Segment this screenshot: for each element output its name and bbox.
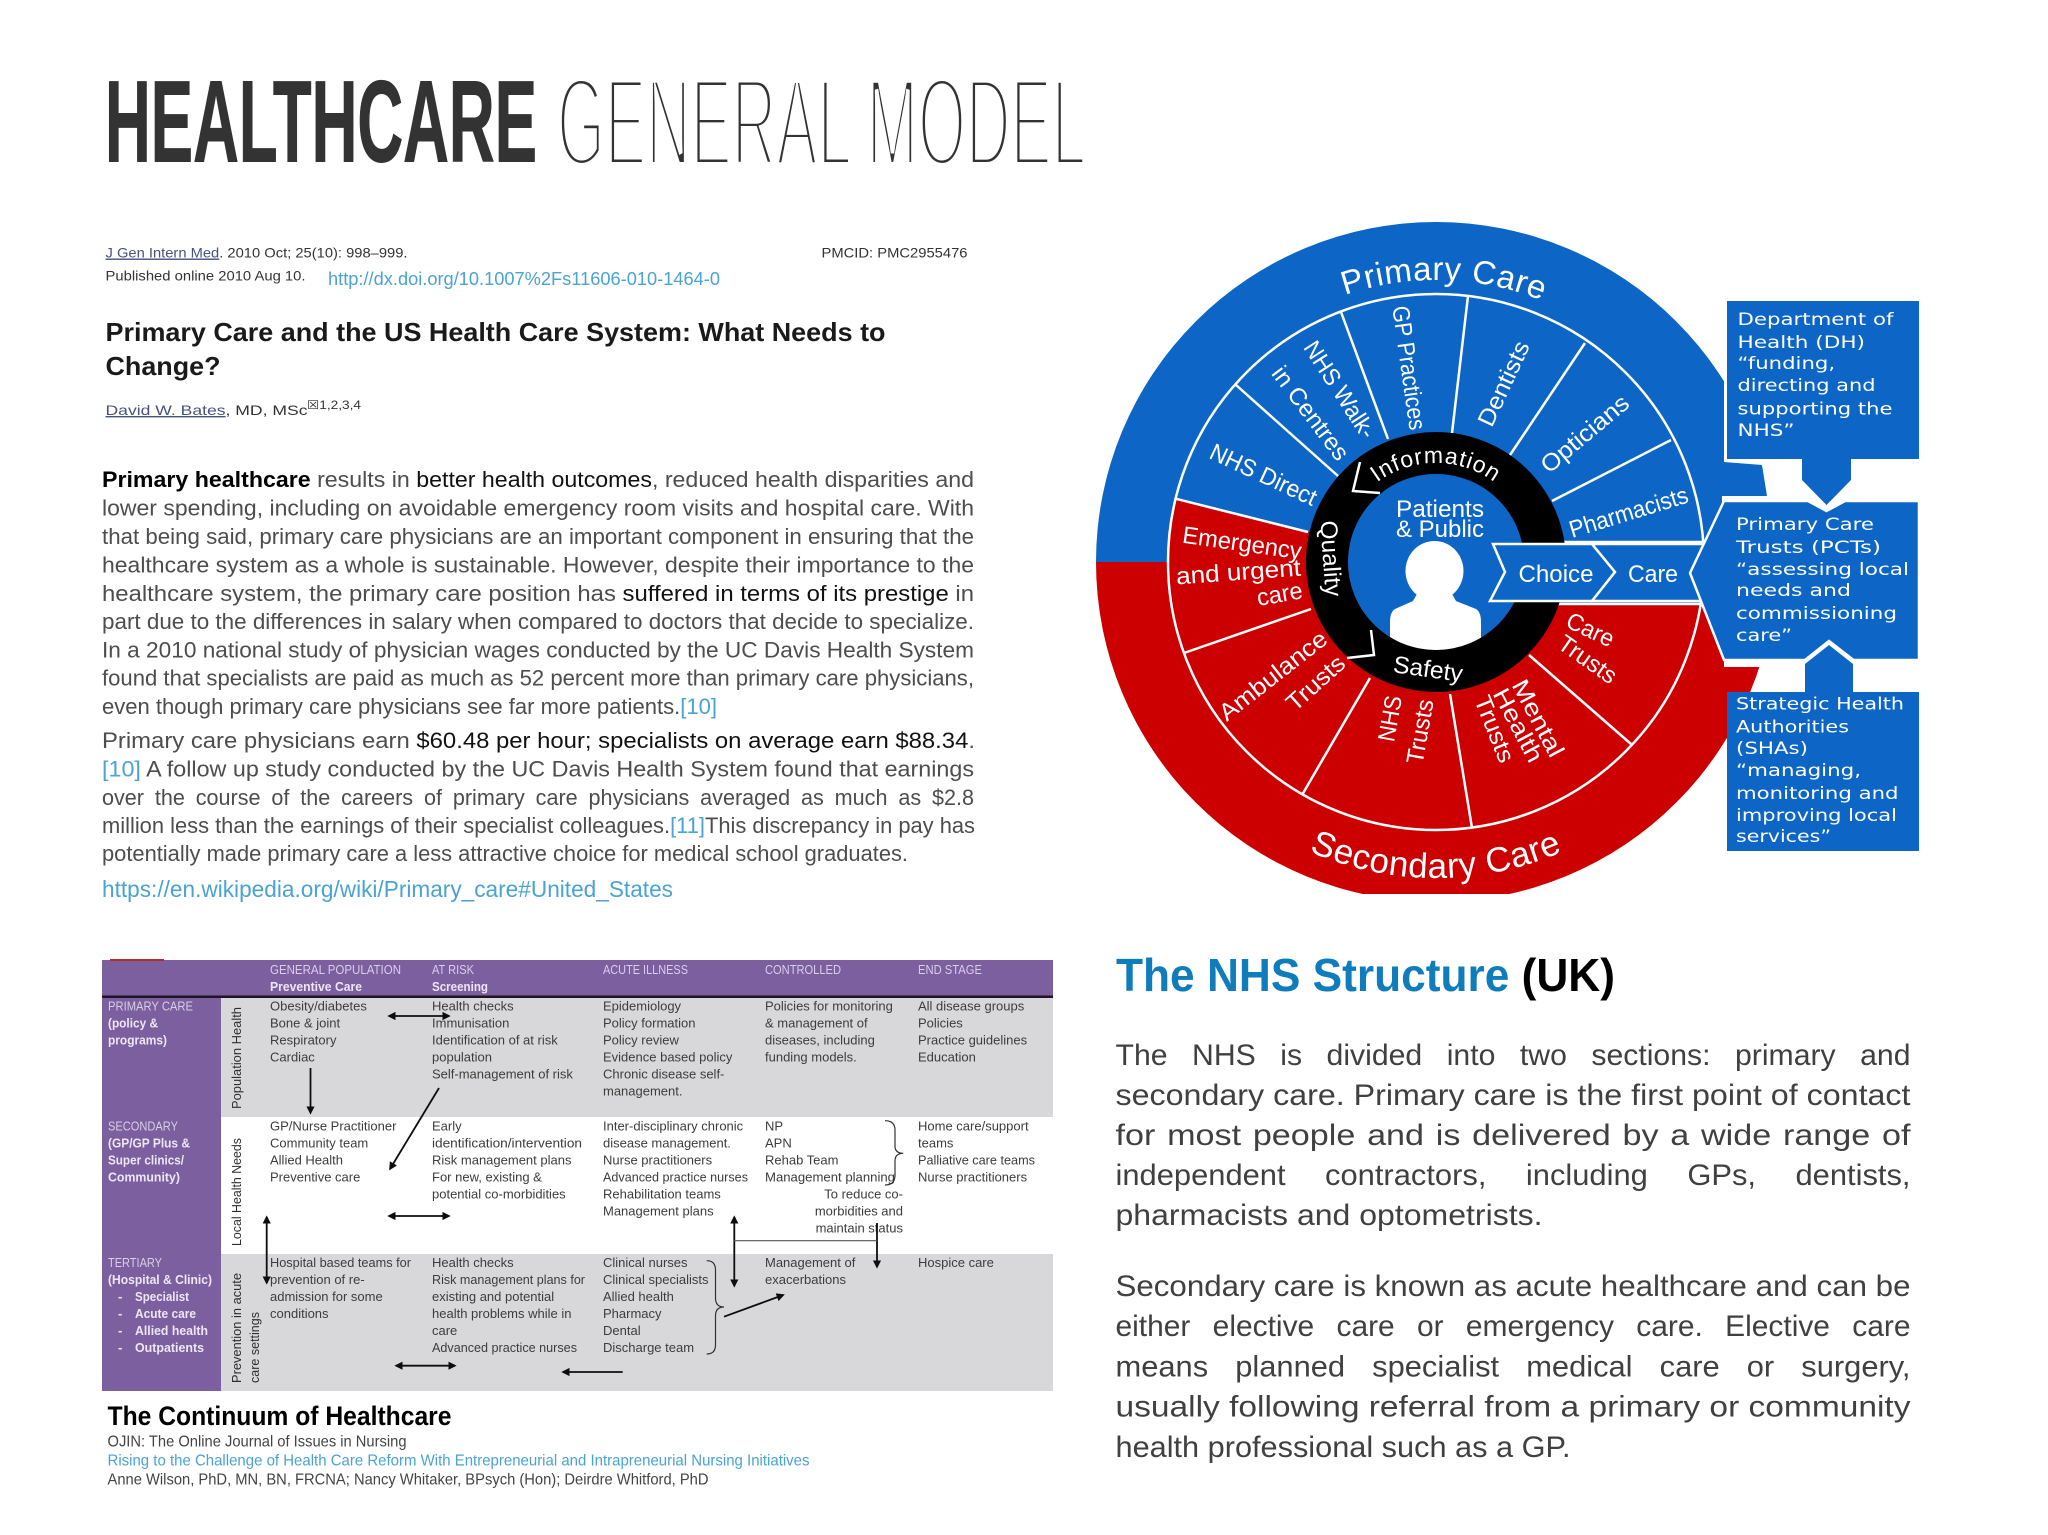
row: primary care cells: Education (918, 1050, 976, 1064)
sector labels: secondary care (1175, 522, 1622, 767)
sector labels: primary care: NHS Walk- (1298, 336, 1381, 444)
article citation header: David W. Bates , MD, MSc (106, 402, 308, 418)
chart: NHS structure wheel (1096, 222, 1919, 894)
row headers: SECONDARY (108, 1118, 178, 1134)
column headers: ACUTE ILLNESS (603, 962, 688, 977)
row: primary care cells: All disease groups (918, 998, 1025, 1014)
row: tertiary cells: conditions (270, 1306, 329, 1321)
row: secondary cells: Palliative care teams (918, 1152, 1035, 1168)
article citation header: Primary Care and the US Health Care System: What Needs to (106, 317, 886, 347)
row headers: Specialist (135, 1289, 190, 1304)
column headers: GENERAL POPULATION (270, 962, 401, 977)
row: tertiary cells: Management of (765, 1255, 856, 1270)
row: secondary cells: To reduce co- (824, 1186, 903, 1202)
row headers: - (118, 1323, 122, 1338)
row: tertiary cells: Risk management plans for (432, 1272, 586, 1287)
article citation header: Change? (106, 351, 220, 381)
title: GENERAL MODEL (557, 53, 1086, 192)
sector labels: primary care (1205, 304, 1692, 544)
text block: primary healthcare paragraph: In a 2010 national study of physician wages conducted by the UC Davis Health System (102, 638, 974, 662)
panel: Primary Care Trusts: needs and (1736, 581, 1851, 601)
row: primary care cells: & management of (765, 1016, 868, 1030)
text block: physician earnings paragraph: million less than the earnings of their specialist colleagues.[11]This discrepancy in pay has (102, 813, 975, 838)
text block: physician earnings paragraph: over the course of the careers of primary care physicians averaged as much as $2.8 (102, 785, 974, 810)
row: primary care cells: Policy formation (603, 1016, 695, 1030)
row: secondary cells: Preventive care (270, 1170, 360, 1184)
label: Patients & Public: & Public (1396, 516, 1484, 543)
panel: Primary Care Trusts: “assessing local (1736, 560, 1909, 580)
sector labels: secondary care: Trusts (1553, 630, 1622, 690)
panel: Strategic Health Authorities: Authorities (1736, 718, 1849, 738)
sector labels: primary care: GP Practices (1386, 304, 1430, 432)
row: tertiary cells: Allied health (603, 1289, 674, 1304)
label: Patients & Public: Patients (1396, 496, 1484, 523)
row: secondary cells: Rehab Team (765, 1152, 838, 1168)
wikipedia link: https://en.wikipedia.org/wiki/Primary_care#United_States (102, 876, 673, 902)
label: Safety: Safety (1392, 651, 1465, 688)
text block: physician earnings paragraph: potentially made primary care a less attractive choice for medical school graduates. (102, 841, 908, 866)
caption: continuum of healthcare: Anne Wilson, PhD, MN, BN, FRCNA; Nancy Whitaker, BPsych (Hon); Deirdre Whitford, PhD (108, 1471, 708, 1488)
text block: primary healthcare paragraph: lower spending, including on avoidable emergency room visits and hospital care. With (102, 496, 974, 520)
row: primary care cells: Policies for monitoring (765, 998, 893, 1014)
panel: Strategic Health Authorities: (SHAs) (1736, 739, 1808, 759)
outer ring: secondary care (1096, 562, 1760, 894)
row headers (108, 998, 212, 1355)
row: tertiary cells: Clinical specialists (603, 1272, 709, 1287)
panel: Strategic Health Authorities: Strategic Health (1736, 694, 1904, 714)
row headers: Acute care (135, 1306, 196, 1321)
rotated row labels: Prevention in acute (229, 1273, 244, 1383)
text block: primary healthcare paragraph: healthcare system, the primary care position has suffered in terms of its prestige in (102, 581, 974, 606)
icon: person (1390, 541, 1481, 660)
sector labels: primary care: Opticians (1536, 390, 1635, 479)
label: Choice: Choice (1518, 561, 1594, 588)
row headers: Allied health (135, 1323, 208, 1338)
panel: Primary Care Trusts: Primary Care (1736, 515, 1874, 535)
row: primary care cells: Cardiac (270, 1050, 315, 1064)
text block: secondary care: either elective care or emergency care. Elective care (1116, 1310, 1910, 1343)
row: tertiary cells: prevention of re- (270, 1272, 365, 1287)
panel: Strategic Health Authorities (1727, 645, 1919, 851)
article citation header (106, 244, 968, 418)
rotated row labels: care settings (247, 1312, 262, 1383)
row headers: - (118, 1289, 122, 1304)
sector labels: secondary care: and urgent (1175, 555, 1302, 590)
row: secondary cells: Inter-disciplinary chronic (603, 1118, 744, 1134)
label: Patients & Public (1396, 496, 1484, 543)
text block: physician earnings paragraph: Primary care physicians earn $60.48 per hour; specialists on average earn $88.34 . (102, 728, 975, 753)
text block: NHS sections: The NHS is divided into two sections: primary and (1116, 1039, 1910, 1072)
caption: continuum of healthcare: The Continuum of Healthcare (108, 1401, 452, 1431)
column headers: Preventive Care (270, 979, 362, 994)
row: tertiary cells: Pharmacy (603, 1306, 662, 1321)
row: primary care cells: Health checks (432, 998, 514, 1014)
row: primary care cells: Identification of at risk (432, 1032, 558, 1048)
caption: continuum of healthcare: OJIN: The Online Journal of Issues in Nursing (108, 1434, 406, 1451)
column headers: Screening (432, 979, 488, 994)
panel: Department of Health: supporting the (1738, 400, 1892, 420)
row: secondary cells: Nurse practitioners (603, 1152, 713, 1168)
panel: Department of Health: NHS” (1738, 421, 1794, 441)
row headers: PRIMARY CARE (108, 998, 193, 1014)
row: primary care cells: Bone & joint (270, 1016, 340, 1030)
row: primary care cells: population (432, 1050, 492, 1064)
row headers: (GP/GP Plus & (108, 1136, 190, 1150)
caption: continuum of healthcare: Rising to the Challenge of Health Care Reform With Entrepreneurial and Intrapreneurial Nursing Initiatives (108, 1453, 810, 1470)
label: Primary Care: Primary Care (1340, 261, 1544, 298)
row: primary care cells: Self-management of risk (432, 1066, 573, 1082)
title: HEALTHCARE (105, 56, 537, 186)
row: secondary cells: Risk management plans (432, 1152, 572, 1168)
panel: Department of Health: Health (DH) (1738, 333, 1865, 353)
row headers: Outpatients (135, 1340, 204, 1355)
panel: Strategic Health Authorities: services” (1736, 827, 1831, 847)
article citation header: ☒1,2,3,4 (307, 398, 361, 412)
text block: secondary care: means planned specialist medical care or surgery, (1116, 1350, 1910, 1384)
sector labels: primary care: in Centres (1266, 361, 1354, 466)
panel: Strategic Health Authorities: improving local (1736, 806, 1897, 826)
row: secondary cells: teams (918, 1136, 954, 1150)
sector labels: secondary care: care (1255, 577, 1305, 612)
column headers: END STAGE (918, 962, 982, 977)
row headers: - (118, 1340, 122, 1355)
row: secondary cells: potential co-morbidities (432, 1186, 566, 1202)
heading: NHS structure: The NHS Structure (UK) (1116, 949, 1615, 1001)
sector labels: secondary care: Ambulance (1214, 625, 1333, 727)
arrows and braces (267, 1016, 903, 1372)
panel: Strategic Health Authorities: “managing, (1736, 761, 1861, 781)
row: secondary cells: Advanced practice nurses (603, 1170, 748, 1184)
row: secondary cells: Home care/support (918, 1118, 1029, 1134)
inner wheel: secondary care sector (1169, 500, 1700, 829)
rotated row labels: Local Health Needs (229, 1138, 244, 1246)
row: tertiary cells: existing and potential (432, 1289, 554, 1304)
row: primary care cells: Policy review (603, 1032, 679, 1048)
row: primary care cells: Respiratory (270, 1032, 337, 1048)
sector labels: primary care: Dentists (1473, 337, 1536, 431)
row: secondary cells: APN (765, 1136, 792, 1150)
text block: NHS sections (1116, 1039, 1911, 1232)
row: primary care cells: funding models. (765, 1050, 857, 1064)
row: tertiary cells: Dental (603, 1323, 641, 1338)
text block: primary healthcare paragraph: Primary healthcare results in better health outcomes , reduced health disparities and (102, 467, 974, 492)
article citation header: Published online 2010 Aug 10. (106, 268, 306, 284)
row headers: programs) (108, 1032, 167, 1048)
row headers: (policy & (108, 1016, 158, 1030)
row: secondary cells: Nurse practitioners (918, 1170, 1028, 1184)
row: tertiary cells: Hospice care (918, 1255, 994, 1270)
row headers: (Hospital & Clinic) (108, 1272, 212, 1287)
row: primary care cells: Policies (918, 1016, 963, 1030)
row: secondary cells: Allied Health (270, 1152, 343, 1168)
row: primary care cells: Practice guidelines (918, 1032, 1028, 1048)
panel: Primary Care Trusts: commissioning (1736, 604, 1897, 624)
row: secondary cells: identification/intervention (432, 1136, 582, 1150)
sector labels: secondary care: Trusts (1281, 650, 1351, 717)
arrow: care (1592, 544, 1704, 601)
article citation header: PMCID: PMC2955476 (822, 244, 968, 260)
sector labels: secondary care: Health (1487, 684, 1548, 767)
row: tertiary cells: exacerbations (765, 1272, 846, 1287)
text block: NHS sections: for most people and is delivered by a wide range of (1116, 1119, 1911, 1152)
row: tertiary cells: health problems while in (432, 1306, 571, 1321)
row: secondary cells: Early (432, 1118, 462, 1134)
panel: Primary Care Trusts: care” (1736, 626, 1792, 646)
arrow: choice (1490, 544, 1615, 601)
text block: secondary care: Secondary care is known as acute healthcare and can be (1116, 1270, 1910, 1303)
text block: physician earnings paragraph (102, 728, 975, 866)
row: tertiary cells: Advanced practice nurses (432, 1340, 577, 1355)
row headers: - (118, 1306, 122, 1321)
rotated row labels (229, 1007, 262, 1383)
row headers: Community) (108, 1170, 180, 1184)
sector labels: secondary care: Trusts (1468, 692, 1520, 767)
ring arrow marks (1347, 462, 1380, 658)
sector labels: secondary care: Emergency (1181, 522, 1303, 565)
text block: primary healthcare paragraph: part due to the differences in salary when compared to doctors that decide to specialize. (102, 609, 974, 634)
row: primary care cells: Epidemiology (603, 998, 682, 1014)
text block: primary healthcare paragraph (102, 467, 974, 719)
row: primary care cells: Chronic disease self- (603, 1066, 724, 1082)
row: tertiary cells: Discharge team (603, 1340, 694, 1355)
chart: continuum of healthcare table (102, 959, 1053, 1391)
text block: secondary care: usually following referral from a primary or community (1116, 1390, 1910, 1424)
text block: secondary care (1116, 1270, 1910, 1464)
label: Secondary Care: Secondary Care (1312, 832, 1560, 884)
sector labels: secondary care: Mental (1506, 675, 1569, 762)
column headers: CONTROLLED (765, 962, 841, 977)
panel: Department of Health: directing and (1738, 376, 1876, 396)
row: secondary cells: Rehabilitation teams (603, 1186, 721, 1202)
inner wheel base (1168, 294, 1704, 830)
rotated row labels: Population Health (229, 1007, 244, 1109)
text block: primary healthcare paragraph: that being said, primary care physicians are an important component in ensuring that the (102, 524, 974, 549)
panel: Department of Health: Department of (1738, 310, 1895, 330)
row: secondary cells: For new, existing & (432, 1170, 542, 1184)
panel: Strategic Health Authorities: monitoring and (1736, 784, 1898, 804)
label: Quality: Quality (1314, 520, 1347, 597)
row: secondary cells: disease management. (603, 1136, 731, 1150)
row: primary care cells: diseases, including (765, 1032, 875, 1048)
caption: continuum of healthcare (108, 1401, 810, 1488)
row: tertiary cells: Health checks (432, 1255, 514, 1270)
text block: NHS sections: pharmacists and optometrists. (1116, 1199, 1542, 1232)
row: secondary cells: Management planning (765, 1170, 895, 1184)
article citation header: http://dx.doi.org/10.1007%2Fs11606-010-1464-0 (328, 269, 720, 289)
row: tertiary cells (270, 1255, 994, 1355)
row: tertiary cells: Clinical nurses (603, 1255, 688, 1270)
row: secondary cells (270, 1118, 1035, 1236)
row: tertiary cells: care (432, 1323, 457, 1338)
outer ring: primary care (1096, 222, 1767, 562)
text block: primary healthcare paragraph: found that specialists are paid as much as 52 percent more than primary care physicians, (102, 666, 974, 690)
row: tertiary cells: admission for some (270, 1289, 383, 1304)
black ring (1327, 453, 1545, 671)
label: Care: Care (1628, 561, 1678, 588)
row: secondary cells: morbidities and (815, 1204, 903, 1218)
row: secondary cells: GP/Nurse Practitioner (270, 1118, 397, 1134)
row: primary care cells: Evidence based policy (603, 1050, 733, 1064)
text block: secondary care: health professional such as a GP. (1116, 1431, 1570, 1464)
sector labels: secondary care: NHS (1373, 694, 1408, 744)
article citation header: J Gen Intern Med . 2010 Oct; 25(10): 998–999. (106, 244, 408, 260)
text block: physician earnings paragraph: [10] A follow up study conducted by the UC Davis Health System found that earnings (102, 756, 974, 782)
wheel spokes (1168, 294, 1704, 830)
sector labels: primary care: NHS Direct (1205, 439, 1321, 512)
row: primary care cells: Obesity/diabetes (270, 998, 367, 1014)
panel: Department of Health: “funding, (1738, 354, 1835, 374)
row: primary care cells: management. (603, 1084, 682, 1098)
row: secondary cells: NP (765, 1118, 783, 1134)
panel: Department of Health (1727, 301, 1919, 505)
row: secondary cells: Community team (270, 1136, 368, 1150)
panel: Primary Care Trusts (1690, 501, 1919, 660)
row: tertiary cells: Hospital based teams for (270, 1255, 412, 1270)
column headers (270, 962, 982, 994)
row headers: Super clinics/ (108, 1152, 184, 1168)
table background bands (102, 959, 1053, 1391)
text block: primary healthcare paragraph: even though primary care physicians see far more patients.[10] (102, 694, 717, 719)
row: primary care cells (270, 998, 1028, 1098)
text block: NHS sections: independent contractors, including GPs, dentists, (1116, 1159, 1910, 1192)
sector labels: secondary care: Trusts (1402, 697, 1440, 766)
text block: primary healthcare paragraph: healthcare system as a whole is sustainable. However, despite their importance to the (102, 552, 974, 578)
sector labels: secondary care: Care (1562, 607, 1619, 653)
label: Information: Information (1370, 450, 1498, 482)
text block: NHS sections: secondary care. Primary care is the first point of contact (1116, 1079, 1911, 1112)
sector labels: primary care: Pharmacists (1566, 482, 1692, 544)
panel: Primary Care Trusts: Trusts (PCTs) (1735, 538, 1881, 558)
column headers: AT RISK (432, 962, 474, 977)
row: primary care cells: Immunisation (432, 1016, 509, 1030)
inner disc (1348, 474, 1524, 650)
row: secondary cells: maintain status (816, 1220, 903, 1236)
row: secondary cells: Management plans (603, 1204, 714, 1218)
row headers: TERTIARY (108, 1255, 162, 1270)
